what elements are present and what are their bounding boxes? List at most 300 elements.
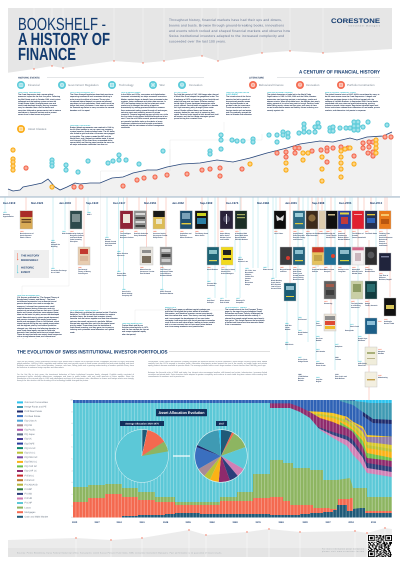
book: teal cover third row: [284, 283, 296, 301]
event captions: BVG Pension: [271, 283, 281, 286]
book: pale cover lowest: Misbehaving: [378, 376, 388, 379]
footer contact: please visit www.corestone-im.com: [322, 550, 364, 553]
box: 2017 label: [216, 421, 227, 426]
event captions: Korean War: [117, 272, 126, 275]
book: Reminiscences of a Stock Operator: Stock Operator: [20, 234, 32, 237]
book: black cover: Loser's Game: [326, 234, 337, 237]
legend: literature: [249, 76, 380, 89]
book: Portfolio Selection: 1952: [134, 230, 138, 233]
timeline connector lines: events: [5, 197, 376, 370]
stacked allocation chart: 3: [72, 481, 73, 484]
legend: historic events: Government Regulation: [68, 83, 99, 87]
book: cream cover: 1996: [319, 230, 323, 233]
event captions: Law In Force: [271, 285, 281, 288]
book: General Theory: Theory of Money: [78, 270, 91, 273]
key box: history bookshelf and historic event: [14, 250, 49, 278]
heading: a century of financial history: A CENTURY OF FINANCIAL HISTORY: [299, 70, 381, 76]
book: dark navy cover: Different: [379, 276, 386, 279]
event captions: 1992: [285, 341, 289, 344]
book: teal cover third: Long Run: [338, 270, 345, 273]
book: Portfolio Selection: Portfolio Selection: [134, 232, 148, 235]
stacked allocation chart: 10: [70, 399, 72, 402]
book: teal cover: Capital Ideas: [293, 232, 303, 235]
event captions: Suez Crisis: [122, 290, 131, 293]
book: pale cover lowest: [365, 372, 388, 387]
event captions: Japan: [285, 326, 290, 329]
book: navy cover: 2007: [365, 230, 369, 233]
timeline axis: Jan-1962: [172, 201, 184, 205]
event captions: Draghi Says: [358, 337, 367, 340]
book: dark navy cover: [379, 253, 392, 281]
book: white red yellow cover: [324, 314, 336, 331]
event captions: Lehman: [335, 358, 341, 361]
event captions: Subprime: [335, 345, 342, 348]
book: Theory of Investment Value: The Theory of: [160, 268, 171, 271]
book: General Theory: John Keynes: [78, 272, 88, 275]
event captions: Hedge Funds: [298, 360, 308, 363]
book: red cover: Crowds: [352, 234, 358, 237]
book: cream cover lower: Markets: [378, 352, 384, 355]
book: black cover: Charles Ellis: [326, 236, 336, 239]
event captions: 1944: [105, 236, 109, 239]
event captions: 2000: [316, 335, 320, 338]
box: average allocation label: Average Allocation 1920-1970: [125, 422, 159, 425]
event captions: 1985: [263, 266, 267, 269]
allocation legend: FI EUR: [24, 497, 32, 500]
book: cream and green cover: 2005: [351, 300, 355, 303]
event captions: Steagall Act: [51, 243, 61, 246]
event captions: 1999: [316, 320, 320, 323]
event captions: Downgrade: [345, 329, 354, 332]
event captions: 1948: [117, 250, 121, 253]
event captions: Swaps: [245, 283, 250, 286]
event captions: 1997: [298, 356, 302, 359]
book: The Money Game: Adam Smith: [195, 234, 204, 237]
event captions: 2012: [358, 335, 362, 338]
book: red cover: James Surowiecki: [352, 236, 366, 239]
logo: Investment Managers: [348, 25, 381, 28]
legend: historic events: Financial: [28, 83, 40, 87]
book: teal cover third: [338, 247, 351, 273]
allocation legend: EQ UK: [24, 438, 32, 441]
allocation legend: EQ Pacific: [24, 428, 36, 432]
stacked allocation chart: 2: [72, 493, 73, 496]
event panel: financial crisis: The global financial crisis of 2007-2008 is considered by many to be the most severe since the Great Depression. It began with subprime mortgage losses in the USA and spread with the collapse of Lehman Brothers in September 2008. Central banks responded with zero rates and quantitative easing, pushing investors toward riskier assets. Regulation tightened again and Swiss institutions widened their allocations to real estate, private markets, and alternative risk premia in response.: [325, 94, 380, 112]
event panel: oil crisis: The Cold War period of 1947-1991 began after the end of World War II and shaped the geopolitical order. The oil embargo of 1973 raised energy prices fourfold and ended the long post-war boom. Inflation reached double digits in most developed economies while growth slowed. Central banks struggled for a decade until tight monetary policy brought prices under control. Bonds suffered heavy real losses and investors looked for new ways of protecting their capital. Pension funds began to look abroad and hold real assets, and the first hedge strategies gained ground during this uncertain time.: [174, 94, 219, 120]
stacked allocation chart: 9: [72, 410, 73, 413]
book: navy cover: [365, 211, 377, 235]
event captions: Interest: [245, 277, 251, 280]
timeline axis: Dec-1947: [113, 201, 126, 205]
allocation legend: EQ EMU SC: [24, 456, 38, 459]
allocation legend: Hedge Funds and PE: [24, 406, 47, 409]
event captions: Act of 1934: [51, 271, 60, 274]
book: Security Analysis: 1934: [70, 230, 74, 233]
book: dark grey cover: [365, 247, 377, 273]
portfolio evolution text: left column: Over the last century, Swiss institutional investors have moved from a simple mix of domestic bonds, mortgages and loans to highly diversified global portfolios. Until the 1960s, regulation and tradition kept most pension assets in fixed income securities and real estate lending, and stock holdings were minimal. Over recent decades, however, new laws, falling yields and a growing understanding of modern portfolio theory have led investors to embrace foreign equities and alternatives.: [17, 361, 134, 369]
event captions: 1987: [271, 277, 275, 280]
event captions: [3, 211, 367, 383]
event panel: regulation: 1933 GLASS-STEAGALL ACT: [70, 92, 95, 94]
intro paragraph: succeeded over the last 100 years.: [169, 39, 226, 43]
event captions: 1965: [207, 280, 211, 283]
footer band: [8, 527, 392, 557]
book: Super Money: Market Cycles: [220, 236, 231, 239]
event captions: Enron Crash: [316, 364, 326, 367]
event captions: ERM Crisis: [285, 343, 294, 346]
legend: historic events: War: [160, 83, 165, 87]
book: Where Are the Customers' Yachts: [140, 247, 154, 275]
book: teal cover third: 1999: [338, 266, 342, 269]
year axis: 1920: [72, 521, 78, 524]
legend: asset classes: Asset Classes: [28, 127, 47, 131]
event captions: 2010: [335, 373, 339, 376]
event captions: Banking: [51, 245, 57, 248]
book: Reminiscences of a Stock Operator: Reminiscences of: [20, 232, 34, 235]
book: black cover butterfly: Liar's Poker: [274, 232, 283, 235]
book: General Theory: 1936: [78, 266, 82, 269]
event panel: market efficiency: In 1970 Fama's paper on efficient capital markets was published. He argued that prices reflect all available information, and therefore investors cannot consistently beat the market after costs. This theory was hotly debated and it encouraged the development of low-cost index strategies. Later empirical work found persistent anomalies such as the size and value effects, leading to factor models and to a more nuanced view of how asset prices behave over time among academics and practitioners.: [165, 309, 215, 328]
market performance line: [8, 132, 392, 191]
intro paragraph: booms and busts. Browse through ground-breaking books, innovations: [169, 24, 284, 28]
allocation legend: FI EM HC: [24, 479, 35, 482]
book: The Intelligent Investor: Investor: [120, 234, 127, 237]
book: blue cover: [338, 211, 351, 241]
legend: historic events: [17, 76, 204, 89]
book: brown cover: [306, 211, 319, 237]
book: black and yellow cover: 2012: [384, 318, 388, 321]
event captions: Launch: [316, 324, 322, 327]
stacked allocation chart: 5: [72, 458, 73, 460]
footer note: Sources: Pictet, Bloomberg, Swiss Federal Statistical Office, Swisscanto, Credit Suisse Pension Fund Index, SNB, Corestone Investment Managers. Past performance is no guarantee of future results.: [17, 551, 223, 554]
event captions: 2001: [316, 348, 320, 351]
book: yellow cover: The Loser's Game: [221, 268, 235, 271]
event captions: Bretton: [105, 238, 111, 241]
book: The Intelligent Investor: The Intelligent: [120, 232, 131, 235]
event captions: Eurobond Market: [160, 292, 174, 295]
book: dark teal cover: Nudge: [365, 302, 370, 305]
event captions: Gold Pool: [207, 299, 215, 302]
box: asset allocation evolution: [156, 409, 207, 416]
book: brown cover: Peter Bernstein: [306, 234, 318, 237]
event captions: 1933: [51, 239, 55, 242]
book: dark teal cover: Thaler, Sunstein: [365, 304, 377, 307]
book: blue cover: Robert Shiller: [338, 236, 349, 239]
timeline axis: Sep-1969: [200, 201, 213, 205]
book: A Random Walk Down Wall Street: Efficient Markets: [235, 238, 248, 241]
box: average allocation label: [120, 421, 164, 426]
book: yellow and red cover: Expected Returns: [312, 268, 326, 271]
event captions: 1960: [160, 288, 164, 291]
book: blue cover: Market Bubbles: [338, 238, 350, 241]
book: teal cover second row: One Up On: [293, 268, 301, 271]
book: dark teal cover: [365, 281, 377, 307]
legend: historic events: Innovation: [189, 83, 203, 87]
timeline axis: Mar-1955: [144, 201, 157, 205]
event captions: Dot-Com: [316, 337, 323, 340]
event captions: 1994: [298, 329, 302, 332]
event captions: WorldCom: [316, 362, 325, 365]
book: blue cover: Exuberance: [338, 234, 347, 237]
book: white and pink cover: [352, 247, 364, 275]
event captions: LTCM Bailout: [298, 375, 309, 378]
book: orange cover: and Biases: [379, 244, 388, 247]
event captions: Flash Crash: [350, 325, 359, 328]
legend: literature: LITERATURE: [249, 76, 264, 79]
event captions: Vietnam War: [207, 282, 217, 285]
book: teal cover second row: Wall Street: [293, 270, 302, 273]
portfolio evolution text: right column: Between the financial crisis of 2008 and today, low interest rates encouraged another shift toward real estate, infrastructure, insurance-linked securities and private debt. Swiss investors have adapted to greater complexity and continue to seek stable long-term returns while meeting their commitments to members and to pensioners.: [148, 372, 267, 378]
allocation legend: Mortgages: [24, 511, 36, 514]
book: teal cover second row: Stock Picking: [293, 276, 303, 279]
book: dark navy cover: 2009: [379, 272, 383, 275]
book: dark grey cover: Randomness: [365, 270, 375, 273]
allocation legend: FI EM LC: [24, 474, 35, 477]
book: Common Stocks and Uncommon Profits: Philip Fisher: [153, 236, 163, 239]
year axis: 1983: [278, 521, 284, 524]
book: white and pink cover: Market Value: [352, 272, 362, 275]
event panel: great depression: The Great Depression had a severe global economic impact for the first five years. Following the Wall Street crash in October 1929, stock prices collapsed and the banking system across the United States failed. Unemployment rose and world trade declined sharply, leaving investors wary for decades. New rules for banks and securities followed as governments tried to restore confidence in financial markets and to protect savers from further losses and panics.: [18, 94, 61, 116]
book: The Intelligent Investor: Benjamin Graham: [120, 236, 134, 239]
event captions: Euro Crisis and: [335, 375, 347, 378]
book: Super Money: Adam Smith: [220, 234, 229, 237]
event captions: Floor End: [358, 364, 365, 367]
timeline axis: Mar-2013: [370, 201, 383, 205]
header background with skyline: [8, 8, 392, 73]
allocation legend: EUR Real Estate: [24, 410, 43, 413]
book: red cover: 2004: [352, 230, 356, 233]
book: black cover: 1998: [326, 230, 330, 233]
event captions: Collapse: [207, 301, 214, 304]
book: orange cover: Thinking, Fast: [379, 232, 390, 235]
book: grey noise cover third row: [324, 281, 336, 305]
asset class markers: [10, 137, 379, 190]
title: BOOKSHELF -: [18, 14, 106, 34]
book: blue cover red circle: Analysis: [324, 270, 331, 273]
book: yellow cover: Charles Ellis: [221, 270, 231, 273]
timeline axis: Dec-1976: [226, 201, 239, 205]
event panel: regulation: The Glass-Steagall legislation described provisions separating commercial and investment banking in order to avoid conflicts of interest. The act also introduced federal deposit insurance and allowed regulators to limit speculation. Bank credit would no longer fuel stock purchases. It was seen as a model for financial regulation in many countries for several decades until its repeal.: [70, 94, 114, 112]
allocation legend: FI USD: [24, 493, 32, 496]
event captions: 1971: [220, 297, 224, 300]
event panel: index funds: Harry Markowitz published his seminal article "Portfolio Selection" in 1952 that laid the foundation for modern portfolio theory. He showed that investors should consider risk and return together and that diversification reduces the overall variance of a portfolio. William Sharpe later extended this work into the capital asset pricing model. These ideas form the backbone of institutional investing, and they gave rise to passive indexing and systematic asset allocation on a global scale.: [70, 312, 118, 334]
event captions: Insurance: [117, 254, 125, 257]
book: cream and green cover: [351, 281, 363, 309]
allocation legend: EQ US LC: [24, 451, 36, 454]
year axis: 1955: [185, 521, 191, 524]
event captions: Hyperinflation: [3, 215, 14, 218]
event captions: SNB Shock: [358, 362, 367, 365]
book: brown cover: 1994: [306, 230, 310, 233]
event captions: EU Formed: [298, 318, 307, 321]
event panel: financial crisis: 2008-09 GLOBAL FINANCIAL CRISIS: [325, 92, 356, 94]
allocation legend: EQ CHF SC: [24, 465, 37, 468]
stacked allocation chart: 0: [72, 516, 73, 519]
book: Super Money: Super Money: [220, 232, 230, 235]
book: orange cover: [379, 211, 392, 247]
event captions: 9/11 Attacks: [316, 350, 325, 353]
book: grey cover with red spot: and Fear: [280, 270, 287, 273]
portfolio evolution text: right column: Furthermore, Swiss francs and domestic property remained an important anchor for most institutions, while foreign currency bonds were added carefully from the 1970s onward to increase yields. Alternative investments arrived around the turn of the century as hedge funds and private equity products became available to pension funds. The average portfolio holds a much larger number of asset classes than it did fifty years ago.: [148, 361, 267, 367]
book: The Money Game: 1968: [195, 230, 199, 233]
book: dark teal cover: 2008: [365, 300, 369, 303]
book: Common Stocks and Uncommon Profits: Common Stocks: [153, 232, 166, 235]
legend: asset classes: [17, 125, 47, 133]
event captions: Russian: [298, 377, 304, 380]
event panel: bretton woods: 1944 BRETTON WOODS: [70, 124, 90, 126]
book: Security Analysis: Benjamin Graham: [70, 234, 84, 237]
book: teal cover second row: Peter Lynch: [293, 272, 302, 275]
book: grey cover with red spot: [280, 247, 292, 273]
year axis: 1927: [94, 521, 100, 524]
book: Security Analysis: and David Dodd: [70, 236, 82, 239]
book: red cover: The Wisdom of: [352, 232, 364, 235]
book: red cover: [352, 211, 366, 239]
book: Reminiscences of a Stock Operator: Edwin Lefevre: [20, 236, 31, 239]
book: black cover: Winning the: [326, 232, 335, 235]
event captions: 2007: [335, 343, 339, 346]
book: A Random Walk Down Wall Street: Burton Malkiel: [235, 236, 247, 239]
timeline axis: Dec-1919: [3, 201, 16, 205]
book: white and pink cover: 2003: [352, 266, 356, 269]
timeline axis: Sep-1998: [312, 201, 325, 205]
book: Where Are the Customers' Yachts: 1940: [140, 266, 144, 269]
book: black and yellow cover: Antifragile: [384, 320, 392, 323]
book: cream cover: [319, 211, 326, 235]
book: blue cover: Irrational: [338, 232, 345, 235]
allocation legend: Loans: [24, 506, 32, 509]
event captions: Plaza Accord: [263, 268, 273, 271]
event captions: 1967: [207, 297, 211, 300]
book: navy cover: The Black Swan: [365, 232, 377, 235]
event panel: market efficiency: MARCH 1970: [165, 306, 176, 308]
book: blue cover red circle: [324, 247, 336, 273]
book: dark grey cover: Fooled by: [365, 268, 373, 271]
book: cream cover lower: [365, 347, 385, 365]
book: black and yellow cover: [384, 298, 396, 325]
stacked allocation chart: 1: [72, 504, 73, 508]
allocation legend: FI GBP: [24, 488, 32, 491]
event captions: Volcker Era: [245, 275, 254, 278]
event captions: 1998: [298, 373, 302, 376]
event panel: world wars: 1914-45 WORLD WARS: [121, 92, 140, 94]
book: Security Analysis: Value Investing: [70, 238, 82, 241]
timeline axis: Sep-1940: [86, 201, 99, 205]
book: A Random Walk Down Wall Street: [235, 211, 248, 241]
event panel: index funds: 1975-2000 INDEX FUND GROWTH: [70, 310, 98, 312]
book: Theory of Investment Value: John Williams: [160, 272, 171, 275]
event captions: Debt Bailout: [335, 377, 345, 380]
book: Capitalism and Freedom: Milton Friedman: [180, 236, 192, 239]
book: Reminiscences of a Stock Operator: 1923: [20, 230, 24, 233]
event panel: oil crisis: 1973 OIL CRISIS: [174, 92, 187, 94]
allocation legend: FI CAD/AUD: [24, 483, 38, 486]
book: cream and green cover: Investment: [351, 306, 360, 309]
timeline axis: Jan-1933: [59, 201, 71, 205]
book: yellow and red cover: 1995: [312, 266, 316, 269]
event captions: 1939: [87, 211, 91, 214]
QR code: [368, 535, 392, 557]
year axis: 1990: [302, 521, 308, 524]
allocation legend: EQ CHF LC: [24, 470, 37, 473]
allocation legend: Gold and Commodities: [24, 401, 49, 404]
event panel: world wars: In the 1960s and 1970s, computers and digitalisation increased substantially as major economic innovation. Modern markets began to benefit from automated order systems, faster settlement and wider data sources. In 1971 the Nasdaq started as the first electronic stock market and it changed the trading of equities dramatically by making quotes available on screens. Soon automated trading spread through all exchanges, reducing costs and widening access to private investors. Financial engineering grew quickly too, while the first index funds offered diversified exposure at low cost. From the mid 1980s onward, personal computers put powerful portfolio tools on the desks of every investment professional and brought quantitative methods into the mainstream of asset management worldwide.: [121, 94, 168, 129]
book: Theory of Investment Value: 1938: [160, 266, 164, 269]
event captions: 2011: [350, 323, 354, 326]
event captions: End of Gold: [220, 301, 229, 304]
book: Capitalism and Freedom: Freedom: [180, 234, 187, 237]
event panel: dot-com: 1999-2000 INTERNET BUBBLE: [267, 92, 293, 94]
event captions: 1993: [298, 316, 302, 319]
chart area under market line: [8, 132, 392, 196]
book: Reminiscences of a Stock Operator: [20, 211, 34, 239]
event panel: great depression: 1929 GREAT DEPRESSION: [18, 92, 41, 94]
event captions: WW II: [87, 213, 92, 216]
stacked allocation chart: 8: [72, 422, 73, 425]
event captions: Inflation: [245, 273, 251, 276]
legend: historic events: HISTORIC EVENTS: [18, 76, 40, 79]
book: General Theory: [78, 247, 91, 275]
book: teal cover second row: Growth Stocks: [293, 274, 304, 277]
year axis: 1941: [139, 521, 145, 524]
allocation legend: CH Real Estate: [24, 415, 41, 418]
event captions: 1979: [245, 267, 249, 270]
book: Portfolio Selection: [134, 211, 148, 237]
timeline connector lines: books: [26, 197, 390, 400]
footer contact: For more information about Corestone: [322, 547, 364, 550]
book: The Intelligent Investor: 1949: [120, 230, 124, 233]
event captions: 1914: [3, 211, 7, 214]
legend: historic events: Technology: [119, 83, 134, 87]
event captions: Bubble: [316, 339, 322, 342]
allocation legend: EQ EMU LC: [24, 461, 37, 464]
book: Capitalism and Freedom: 1962: [180, 230, 184, 233]
book: Theory of Investment Value: Dividend Model: [160, 274, 172, 277]
book: cream cover: Irrational: [319, 232, 326, 235]
book: teal cover second row: Retail Investor: [293, 278, 304, 281]
event captions: Bond Market: [298, 331, 308, 334]
event captions: Bubble: [285, 328, 291, 331]
event captions: 1929: [62, 230, 66, 233]
event captions: Default: [298, 379, 304, 382]
intro paragraph: Throughout history, financial markets have had their ups and downs,: [169, 18, 282, 22]
pie chart: average allocation 1920-1970: [116, 430, 168, 482]
allocation legend: EQ EAFE: [24, 442, 35, 445]
book: Where Are the Customers' Yachts: Customers' Yachts: [140, 270, 154, 273]
book: The Money Game: The Money Game: [195, 232, 208, 235]
book: blue cover lower: [365, 318, 382, 334]
year axis: 2011: [371, 521, 377, 524]
book: Common Stocks and Uncommon Profits: 1958: [153, 230, 157, 233]
event captions: Pension Law: [238, 260, 249, 263]
book: Security Analysis: Principles: [70, 240, 78, 243]
legend: literature: Behavioral Finance: [259, 83, 284, 87]
title: [18, 14, 110, 64]
book: cream and green cover: The Only Guide: [351, 302, 363, 305]
event captions: Whatever: [358, 339, 366, 342]
book: blue cover: 2000: [338, 230, 342, 233]
event captions: Glass-: [51, 241, 56, 244]
book: blue cover red circle: 1997: [324, 266, 328, 269]
book: grey cover with red spot: 1985: [280, 266, 284, 269]
book: orange cover: Daniel Kahneman: [379, 236, 392, 239]
year axis: [72, 521, 377, 524]
book: Super Money: 1972: [220, 230, 224, 233]
book: dark grey cover: 2006: [365, 266, 369, 269]
book: Portfolio Selection: Harry Markowitz: [134, 234, 147, 237]
book: teal cover third: Stocks for the: [338, 268, 349, 271]
event captions: Swiss Pension: [117, 252, 128, 255]
